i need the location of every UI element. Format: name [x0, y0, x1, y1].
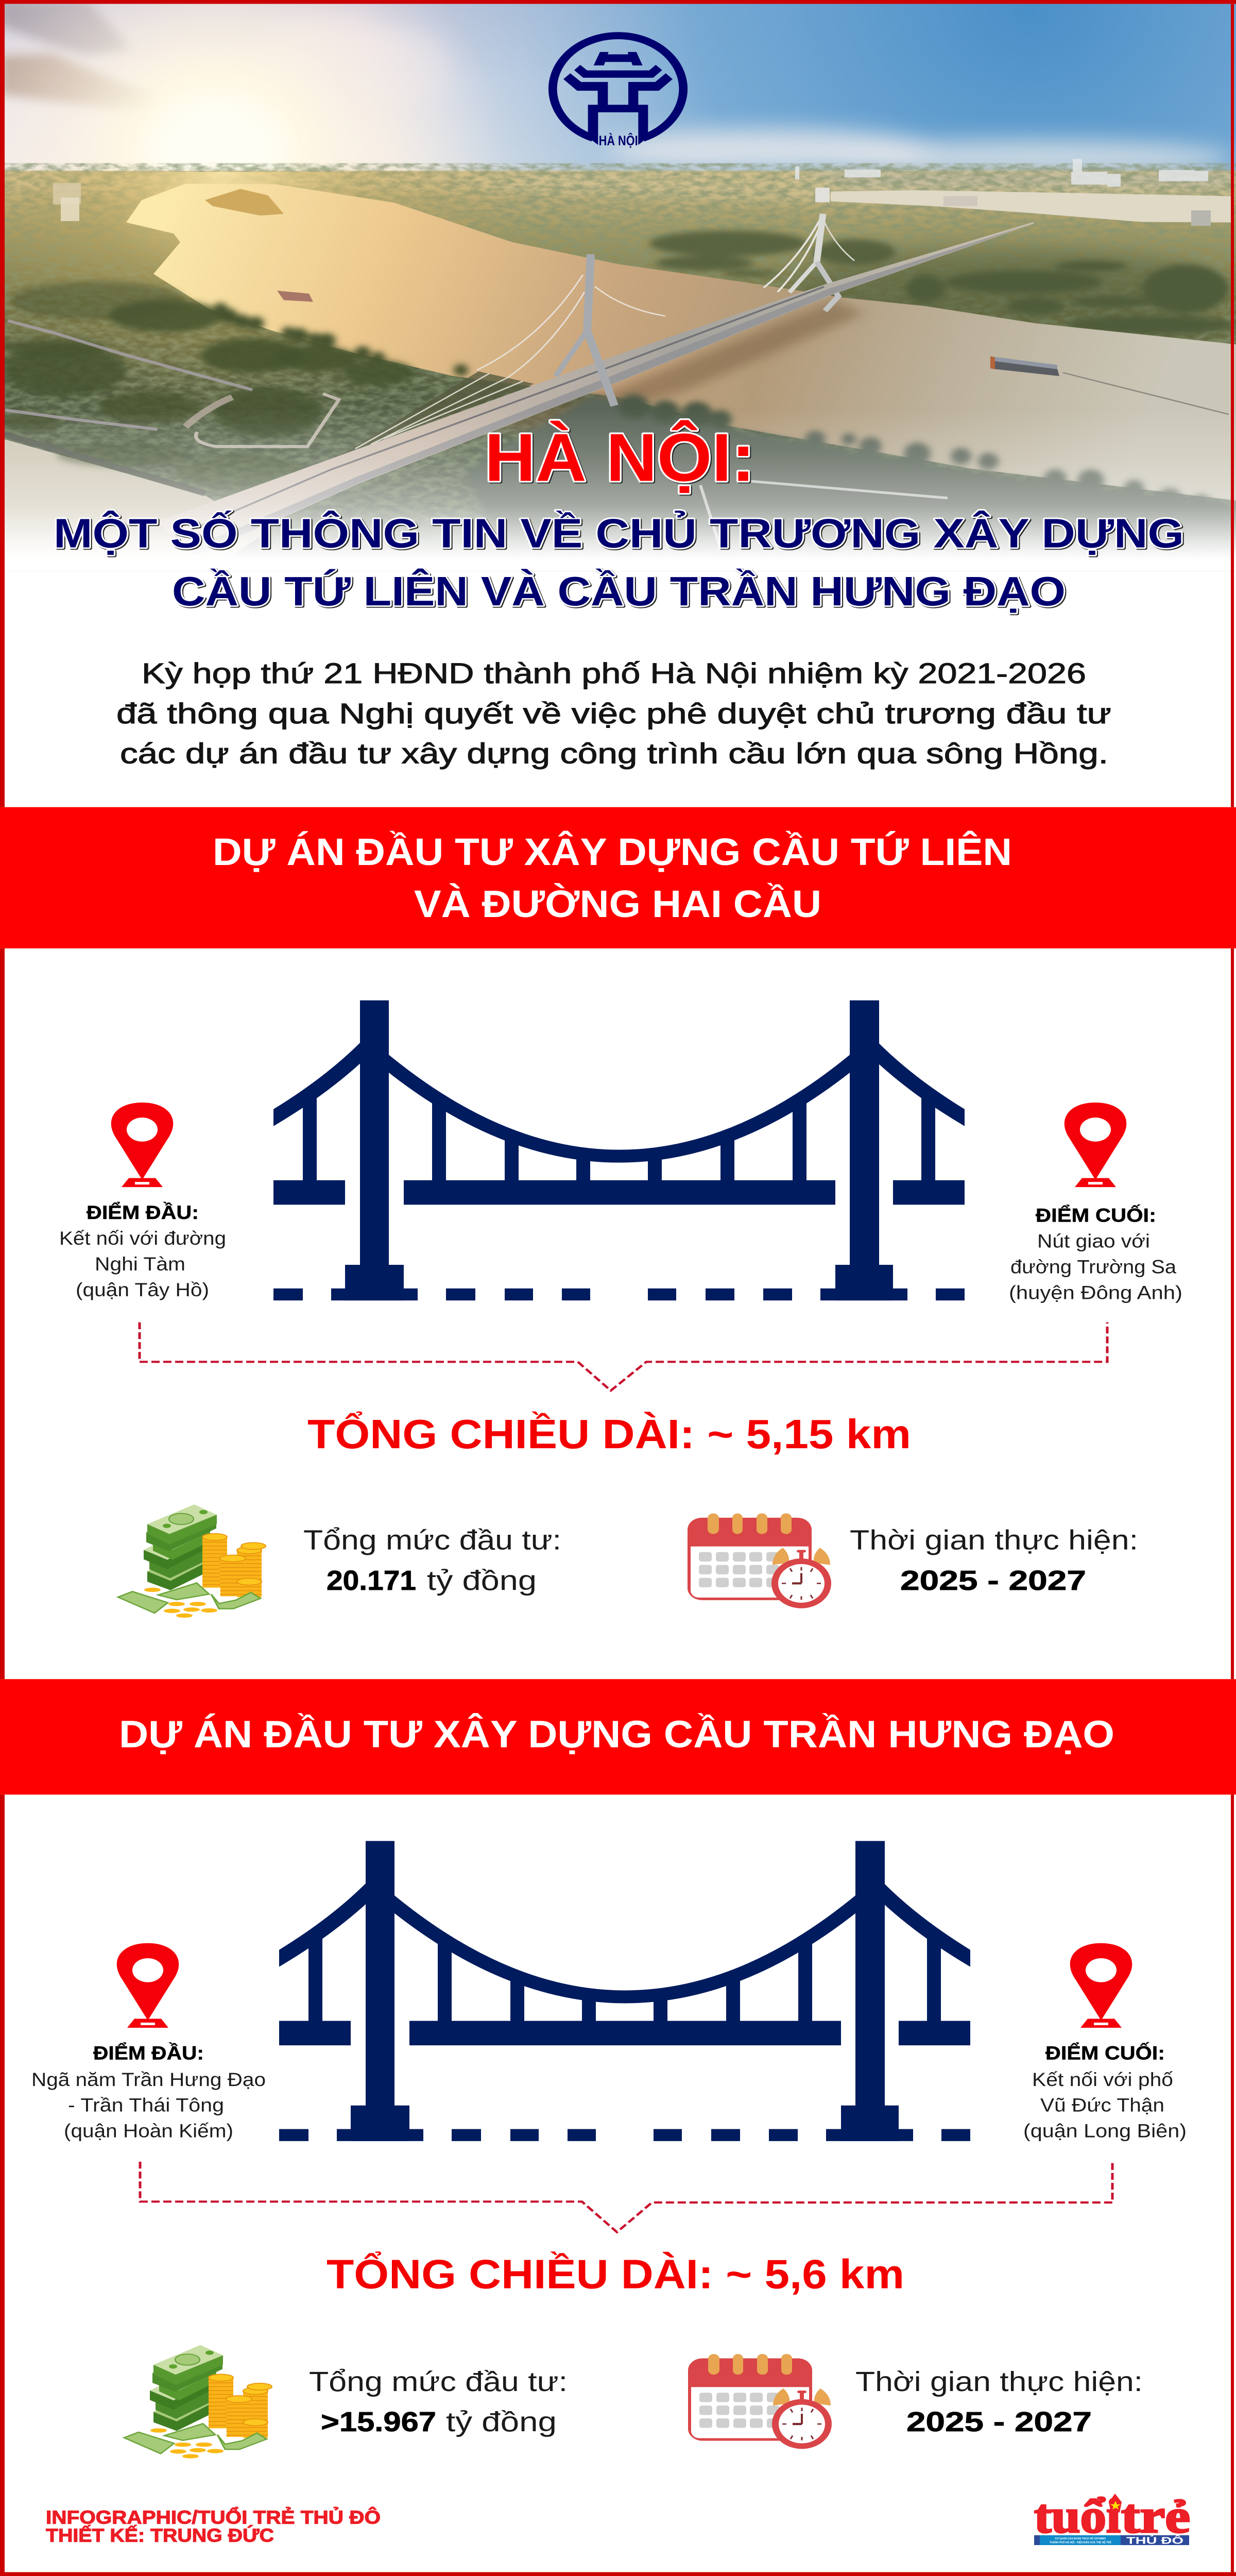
lower-left river [0, 438, 268, 571]
timeline text [850, 1524, 1138, 1596]
end point label: Kết nối với phố [1032, 2069, 1173, 2090]
Tuổi Trẻ Thủ Đô logo [1034, 2490, 1190, 2546]
panel: Tứ Liên bridge project [0, 807, 1236, 1618]
icon: start pin [117, 1943, 179, 2028]
start point label: Kết nối với đường [59, 1227, 226, 1249]
credits: THIẾT KẾ: TRUNG ĐỨC [46, 2526, 274, 2546]
Tuổi Trẻ Thủ Đô logo: trẻ [1121, 2490, 1190, 2543]
credits: INFOGRAPHIC/TUỔI TRẺ THỦ ĐÔ [46, 2507, 381, 2528]
total length: TỔNG CHIỀU DÀI: ~ 5,15 km [307, 1411, 911, 1457]
far lake [831, 190, 1232, 223]
timeline text: Thời gian thực hiện: [850, 1524, 1138, 1555]
end point label: đường Trường Sa [1010, 1256, 1176, 1278]
bridge reflection on river [464, 300, 865, 429]
timeline text: Thời gian thực hiện: [855, 2366, 1143, 2397]
icon: money [118, 1504, 266, 1618]
length bracket [140, 2162, 1112, 2232]
title line 3: CẦU TỨ LIÊN VÀ CẦU TRẦN HƯNG ĐẠO [172, 568, 1066, 614]
Tuổi Trẻ Thủ Đô logo: CƠ QUAN CỦA ĐOÀN TNCS HỒ CHÍ MINH [1055, 2536, 1106, 2540]
credits [46, 2507, 381, 2546]
section heading band [0, 807, 1236, 948]
distant skyline [795, 159, 1208, 187]
intro paragraph: các dự án đầu tư xây dựng công trình cầu lớn qua sông Hồng. [120, 738, 1108, 770]
hero photo: Red River bridge at sunrise [0, 0, 1236, 571]
icon: suspension bridge [263, 1841, 986, 2141]
land mass [0, 170, 1236, 571]
icon: start pin [111, 1103, 173, 1187]
Tuổi Trẻ Thủ Đô logo: tuổi [1034, 2490, 1121, 2543]
end point label: Nút giao với [1037, 1230, 1150, 1252]
total length: TỔNG CHIỀU DÀI: ~ 5,6 km [327, 2251, 904, 2297]
Hanoi city logo: HÀ NỘI [599, 133, 638, 149]
title line 2: MỘT SỐ THÔNG TIN VỀ CHỦ TRƯƠNG XÂY DỰNG [54, 510, 1184, 556]
distant buildings [53, 183, 1211, 226]
white fade [0, 408, 1236, 571]
investment text: Tổng mức đầu tư: [303, 1524, 561, 1555]
start point label: ĐIỂM ĐẦU: [87, 1201, 199, 1223]
start point label: Ngã năm Trần Hưng Đạo [31, 2069, 266, 2090]
icon: calendar [688, 1514, 831, 1608]
start point label [59, 1201, 226, 1300]
section heading band: DỰ ÁN ĐẦU TƯ XÂY DỰNG CẦU TỨ LIÊN [213, 831, 1012, 873]
tree groups [0, 281, 468, 489]
investment text: 20.171 [327, 1565, 416, 1596]
start point label [31, 2042, 266, 2141]
end point label: ĐIỂM CUỐI: [1036, 1204, 1156, 1226]
length bracket [140, 1323, 1107, 1391]
timeline text: 2025 - 2027 [906, 2406, 1092, 2437]
start point label: - Trần Thái Tông [68, 2094, 224, 2115]
panel: Trần Hưng Đạo bridge project [0, 1679, 1236, 2459]
intro paragraph [116, 657, 1111, 770]
near cable fan [343, 275, 665, 454]
section heading band [0, 1679, 1236, 1794]
timeline text [855, 2366, 1143, 2437]
investment text [303, 1524, 561, 1596]
investment text: >15.967 [321, 2406, 436, 2437]
end point label: Vũ Đức Thận [1040, 2094, 1164, 2115]
south shore trees [464, 394, 1236, 571]
start point label: (quận Tây Hồ) [76, 1279, 209, 1300]
icon: end pin [1070, 1943, 1132, 2028]
section heading band: DỰ ÁN ĐẦU TƯ XÂY DỰNG CẦU TRẦN HƯNG ĐẠO [119, 1714, 1114, 1756]
start point label: (quận Hoàn Kiếm) [64, 2120, 233, 2141]
intro paragraph: Kỳ họp thứ 21 HĐND thành phố Hà Nội nhiệm kỳ 2021-2026 [142, 657, 1086, 690]
icon: calendar [688, 2354, 832, 2449]
end point label: (huyện Đông Anh) [1009, 1282, 1182, 1303]
icon: end pin [1065, 1103, 1126, 1187]
river island [205, 189, 284, 215]
Tuổi Trẻ Thủ Đô logo: THÀNH PHỐ HÀ NỘI - DIỄN ĐÀN CỦA THẾ HỆ TRẺ [1050, 2539, 1112, 2544]
icon: money [124, 2345, 272, 2459]
investment text: tỷ đồng [446, 2406, 557, 2437]
title line: Hà Nội: HÀ NỘI: [485, 419, 755, 495]
icon: suspension bridge [258, 1001, 981, 1300]
end point label [1023, 2042, 1187, 2141]
Tuổi Trẻ Thủ Đô logo: THỦ ĐÔ [1126, 2535, 1183, 2546]
investment text: tỷ đồng [427, 1565, 537, 1596]
intro paragraph: đã thông qua Nghị quyết về việc phê duyệt chủ trương đầu tư [116, 698, 1111, 730]
section heading band: VÀ ĐƯỜNG HAI CẦU [414, 883, 821, 925]
near pylon [556, 254, 614, 406]
start point label: Nghi Tàm [95, 1253, 185, 1275]
far pylon and cables [764, 214, 854, 311]
Hanoi city logo [553, 36, 683, 149]
main title [54, 419, 1184, 614]
river [126, 184, 1236, 501]
roads on left bank [4, 320, 948, 550]
timeline text: 2025 - 2027 [900, 1565, 1086, 1596]
boats [277, 291, 1229, 414]
start point label: ĐIỂM ĐẦU: [93, 2042, 204, 2064]
end point label: ĐIỂM CUỐI: [1045, 2042, 1165, 2064]
investment text [309, 2366, 568, 2437]
end point label [1009, 1204, 1182, 1303]
investment text: Tổng mức đầu tư: [309, 2366, 568, 2397]
bridge deck [158, 222, 1034, 556]
end point label: (quận Long Biên) [1023, 2120, 1187, 2141]
sky [5, 4, 1236, 171]
